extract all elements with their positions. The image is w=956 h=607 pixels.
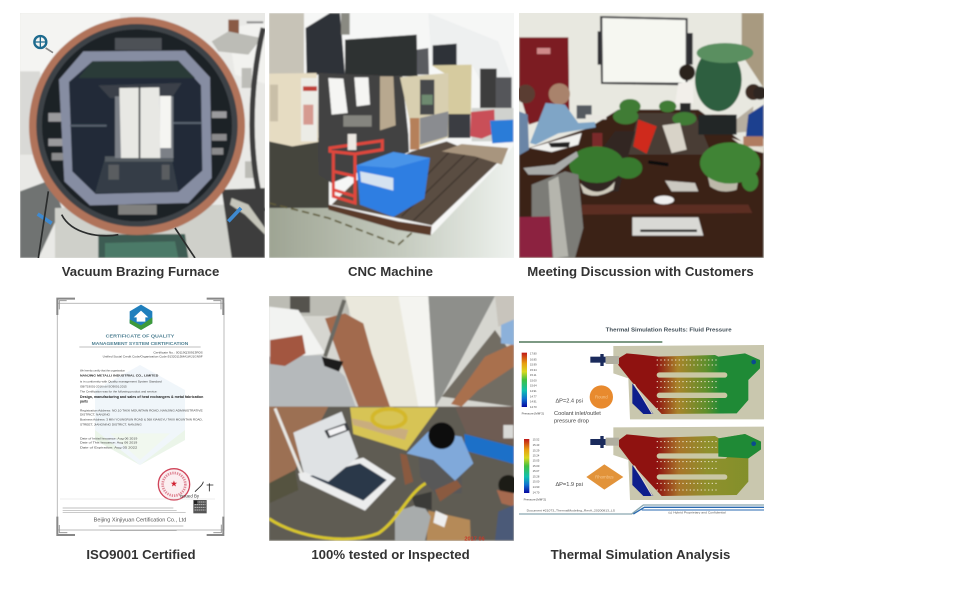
certificate body text: The Certification was for the following product and service: bbox=[80, 390, 158, 394]
legend: lower pressure scale: 15.00 bbox=[533, 480, 540, 484]
icon: blue valve wheel bbox=[34, 36, 53, 53]
legend: lower pressure scale: 15.28 bbox=[533, 474, 540, 478]
legend: upper pressure scale: 14.91 bbox=[530, 389, 537, 393]
certificate title: MANAGEMENT SYSTEM CERTIFICATION bbox=[92, 341, 189, 347]
panel: meeting discussion bbox=[515, 8, 772, 279]
qr code bbox=[193, 500, 207, 513]
slide footer: (c) Hybrid Proprietary and Confidential bbox=[668, 511, 726, 515]
callout: round pin pressure drop: pressure drop bbox=[554, 419, 589, 425]
icon: red stamp: ★ bbox=[170, 479, 178, 489]
legend: upper pressure scale: 15.34 bbox=[530, 368, 537, 372]
photo: furnace chamber bbox=[15, 8, 272, 265]
legend: lower pressure scale: 15.00 bbox=[533, 464, 540, 468]
icon: red stamp bbox=[158, 469, 190, 500]
people: left side of table bbox=[516, 83, 596, 155]
callout: rhombus pin pressure drop bbox=[556, 464, 623, 490]
legend: upper pressure scale: 14.77 bbox=[530, 394, 537, 398]
certificate body text: Date of This Issuance: Aug 06 2019 bbox=[80, 441, 138, 445]
panel: tested or inspected bbox=[265, 290, 522, 562]
slide footer: Document #21073_ThermalModeling_RevA_20200813_LS bbox=[527, 509, 615, 513]
icon: red flag bbox=[633, 120, 657, 154]
caption: Meeting Discussion with Customers bbox=[527, 264, 754, 279]
legend: upper pressure scale: 17.80 bbox=[530, 352, 537, 356]
certificate body text: Date of Expiration: Aug 05 2022 bbox=[80, 445, 138, 449]
panel: ISO9001 certificate bbox=[56, 296, 226, 562]
legend: upper pressure scale bbox=[522, 352, 544, 415]
caption: CNC Machine bbox=[348, 264, 433, 279]
fine print bbox=[63, 508, 186, 513]
panel: thermal simulation bbox=[519, 328, 764, 562]
date stamp: 2017 06 bbox=[464, 537, 485, 543]
slide title: Thermal Simulation Results: Fluid Pressure bbox=[606, 328, 732, 334]
callout: rhombus pin pressure drop: ∆P=1.9 psi bbox=[556, 482, 583, 488]
caption: Vacuum Brazing Furnace bbox=[62, 264, 219, 279]
legend: lower pressure scale: 15.07 bbox=[533, 469, 540, 473]
callout: rhombus pin pressure drop: Rhombus bbox=[595, 475, 614, 480]
watermark hexagon bbox=[95, 365, 185, 465]
certificate body text: STREET, JIANGNING DISTRICT, NANJING bbox=[80, 422, 142, 426]
callout: round pin pressure drop bbox=[554, 385, 613, 425]
caption: Thermal Simulation Analysis bbox=[551, 547, 730, 562]
issuer name: Beijing Xinjiyuan Certification Co., Ltd bbox=[94, 518, 186, 524]
certificate title: CERTIFICATE OF QUALITY bbox=[106, 333, 175, 339]
certificate body text: Certificate No.: 00119Q30913R0S bbox=[153, 350, 203, 354]
callout: round pin pressure drop: Coolant inlet/outlet bbox=[554, 411, 601, 417]
legend: lower pressure scale: 15.43 bbox=[533, 443, 540, 447]
plate: round pin result bbox=[590, 345, 764, 419]
certificate body text: parts bbox=[80, 400, 88, 404]
legend: upper pressure scale: 15.00 bbox=[530, 378, 537, 382]
person: woman at corner bbox=[494, 474, 514, 541]
certificate body text: Design, manufacturing and sales of heat exchangers & metal fabrication bbox=[80, 395, 203, 399]
legend: upper pressure scale: 14.91 bbox=[530, 400, 537, 404]
legend: lower pressure scale: 15.05 bbox=[533, 459, 540, 463]
legend: lower pressure scale: 14.90 bbox=[533, 485, 540, 489]
infographic canvas bbox=[20, 13, 764, 562]
certificate body text: NANJING METALLI INDUSTRIAL CO., LIMITED bbox=[80, 373, 158, 377]
caption: 100% tested or Inspected bbox=[311, 547, 470, 562]
simulation slide bbox=[519, 328, 764, 515]
legend: lower pressure scale: 14.70 bbox=[533, 490, 540, 494]
person: technician crouching bbox=[400, 422, 473, 502]
person: presenter bbox=[675, 64, 695, 113]
icon: thermos flasks bbox=[523, 151, 583, 258]
panel: CNC machine bbox=[265, 8, 522, 279]
people: right side of table bbox=[698, 84, 767, 153]
signature bbox=[180, 482, 213, 499]
certificate body text bbox=[80, 350, 203, 449]
legend: upper pressure scale: 15.64 bbox=[530, 384, 537, 388]
certificate body text: is in conformity with Quality management System Standard bbox=[80, 380, 162, 384]
certificate body text: DISTRICT, NANJING bbox=[80, 413, 110, 417]
certificate body text: Business Address: 3 MIN YOUNGRUN ROAD & 368 XIANGYU TAIXI MOUNTAIN ROAD, bbox=[80, 418, 203, 422]
photo: leak testing and inspection bbox=[265, 290, 522, 547]
certificate title bbox=[92, 333, 189, 347]
legend: upper pressure scale: Pressure [MM*2] bbox=[522, 411, 544, 415]
panel: vacuum brazing furnace bbox=[15, 8, 272, 279]
legend: lower pressure scale: 15.52 bbox=[533, 438, 540, 442]
certificate body text: We hereby certify that the organization bbox=[80, 369, 125, 373]
icon: large potted plant bbox=[569, 146, 642, 196]
legend: upper pressure scale: 16.85 bbox=[530, 357, 537, 361]
photo: CNC machines on workshop floor bbox=[265, 8, 522, 265]
certificate body text: Date of Initial Issuance: Aug 06 2019 bbox=[80, 437, 138, 441]
legend: lower pressure scale: 15.29 bbox=[533, 448, 540, 452]
signature: Issued By bbox=[180, 494, 200, 499]
certificate document bbox=[56, 296, 226, 537]
legend: lower pressure scale: 15.24 bbox=[533, 453, 540, 457]
legend: lower pressure scale bbox=[524, 438, 546, 501]
certificate body text: Unified Social Credit Code/Organization Code:91320115MA1WJ1GN9F bbox=[103, 355, 203, 359]
callout: round pin pressure drop: Round bbox=[595, 395, 608, 400]
caption: ISO9001 Certified bbox=[86, 547, 196, 562]
legend: lower pressure scale: Pressure [MM*2] bbox=[524, 497, 546, 501]
legend: upper pressure scale: 15.99 bbox=[530, 362, 537, 366]
photo: meeting room with customers bbox=[515, 8, 772, 265]
slide footer bbox=[519, 505, 764, 515]
icon: certification logo bbox=[130, 305, 152, 330]
legend: upper pressure scale: 15.11 bbox=[530, 373, 537, 377]
certificate body text: Registration Address: NO.10 TAIXI MOUNTAIN ROAD, NANJING ADMINISTRATIVE bbox=[80, 408, 203, 412]
callout: round pin pressure drop: ∆P=2.4 psi bbox=[556, 398, 583, 404]
certificate body text: GB/T19001-2016 idt ISO9001:2015 bbox=[80, 384, 127, 388]
legend: upper pressure scale: 14.70 bbox=[530, 405, 537, 409]
plate: rhombus pin result bbox=[590, 427, 764, 500]
